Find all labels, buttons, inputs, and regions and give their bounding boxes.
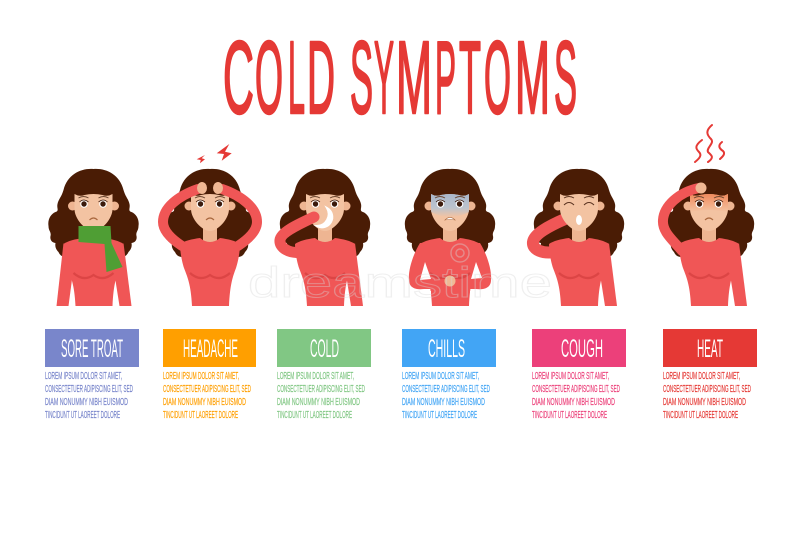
title <box>223 20 577 135</box>
text: CONSECTETUER ADIPISCING ELIT, SED <box>277 383 365 395</box>
panel: heat <box>663 329 757 421</box>
icon: tissue <box>317 208 332 227</box>
panel: cold: DIAM NONUMMY NIBH EUISMOD <box>277 396 360 408</box>
figure: chills <box>405 169 496 307</box>
text: SORE TROAT <box>61 335 123 363</box>
panel: sore throat <box>45 329 139 421</box>
figure: heat <box>663 169 754 306</box>
panel: cough: LOREM IPSUM DOLOR SIT AMET, <box>532 370 609 382</box>
title: C <box>223 20 254 135</box>
panel: headache: HEADACHE <box>183 335 238 363</box>
panel: chills: CHILLS <box>428 335 465 363</box>
title: O <box>255 20 283 135</box>
figure: sore throat <box>48 169 139 306</box>
title: O <box>484 20 511 135</box>
watermark: dreamstime <box>248 259 552 307</box>
title: D <box>307 20 335 135</box>
panel: cold: COLD <box>310 335 339 363</box>
icon: fist <box>444 276 456 286</box>
panel: headache: LOREM IPSUM DOLOR SIT AMET, <box>163 370 239 382</box>
panel: headache: DIAM NONUMMY NIBH EUISMOD <box>163 396 246 408</box>
panel: cough: TINCIDUNT UT LAOREET DOLORE <box>532 409 607 421</box>
panel: headache <box>163 329 256 421</box>
panel: chills <box>402 329 496 421</box>
icon: open mouth <box>576 215 582 225</box>
panel: chills: LOREM IPSUM DOLOR SIT AMET, <box>402 370 479 382</box>
icon: green scarf <box>78 226 122 272</box>
title: Y <box>374 20 394 135</box>
panel: cold <box>277 329 371 421</box>
title: S <box>350 20 373 135</box>
figure: cough <box>533 169 624 306</box>
title: P <box>435 20 456 135</box>
title: M <box>396 20 432 135</box>
panel: sore throat: LOREM IPSUM DOLOR SIT AMET, <box>45 370 122 382</box>
panel: sore throat: TINCIDUNT UT LAOREET DOLORE <box>45 409 120 421</box>
icon: hand on forehead <box>696 182 706 194</box>
text: CONSECTETUER ADIPISCING ELIT, SED <box>45 383 133 395</box>
text: CONSECTETUER ADIPISCING ELIT, SED <box>163 383 251 395</box>
panel: cold: LOREM IPSUM DOLOR SIT AMET, <box>277 370 354 382</box>
panel: chills: TINCIDUNT UT LAOREET DOLORE <box>402 409 477 421</box>
watermark <box>248 244 552 307</box>
text: S <box>554 20 577 135</box>
title: T <box>459 20 481 135</box>
figure: headache <box>163 169 257 306</box>
icon: lightning bolts <box>197 144 232 163</box>
white gaps between arms and torso <box>420 262 482 280</box>
text: CONSECTETUER ADIPISCING ELIT, SED <box>402 383 490 395</box>
panel: chills: DIAM NONUMMY NIBH EUISMOD <box>402 396 485 408</box>
icon: hands on head <box>197 182 223 194</box>
panel: cough: COUGH <box>561 335 603 363</box>
title: M <box>515 20 550 135</box>
title: L <box>288 20 305 135</box>
icon: heat waves <box>695 125 724 162</box>
panel: headache: TINCIDUNT UT LAOREET DOLORE <box>163 409 238 421</box>
panel: heat: HEAT <box>697 335 723 363</box>
panel: sore throat: DIAM NONUMMY NIBH EUISMOD <box>45 396 128 408</box>
figure: cold <box>280 169 370 306</box>
panel: cold: TINCIDUNT UT LAOREET DOLORE <box>277 409 352 421</box>
panel: cough <box>532 329 626 421</box>
panel: cough: DIAM NONUMMY NIBH EUISMOD <box>532 396 615 408</box>
text: CONSECTETUER ADIPISCING ELIT, SED <box>532 383 620 395</box>
